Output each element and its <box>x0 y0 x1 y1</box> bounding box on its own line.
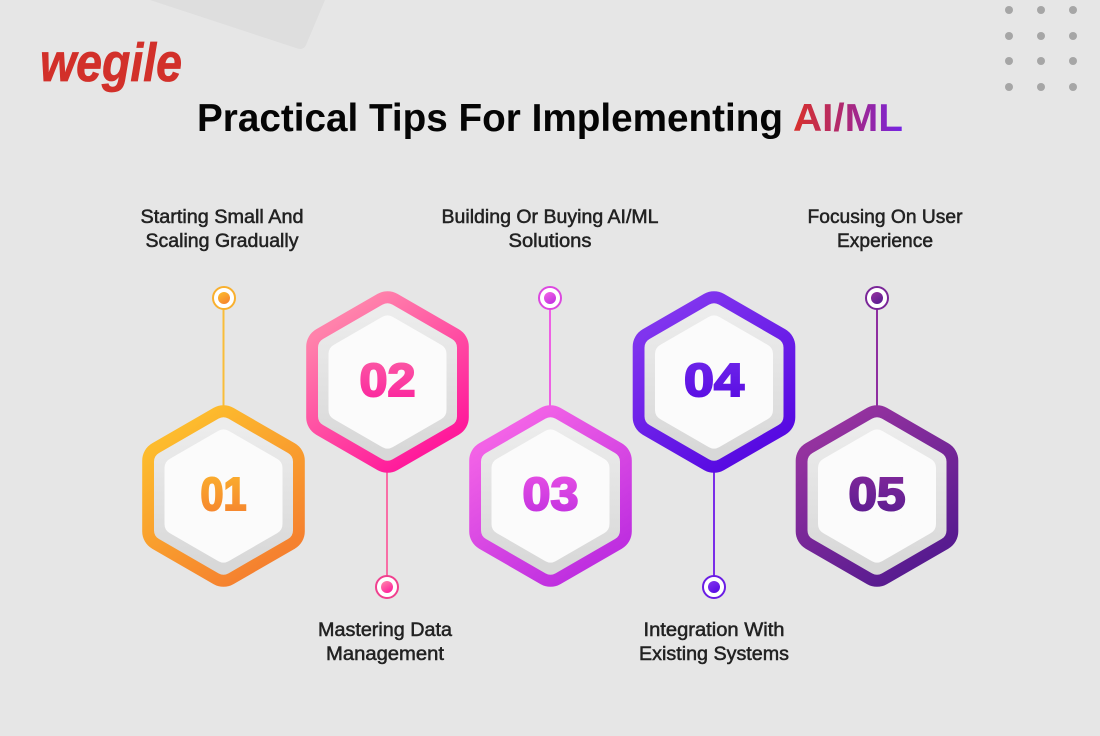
step 4 <box>639 311 789 665</box>
step 3 connector <box>539 287 561 406</box>
step 4 hexagon <box>653 311 775 453</box>
step 3 label: Building Or Buying AI/ML <box>442 207 658 228</box>
step 2 label: Management <box>326 644 445 665</box>
step 3 label: Solutions <box>508 231 592 252</box>
dot grid <box>1005 6 1077 91</box>
step 4 hexagon: 04 <box>684 354 744 406</box>
logo: wegile: wegile <box>40 33 182 93</box>
step 5 <box>808 207 963 567</box>
step 5 label: Focusing On User <box>808 207 963 228</box>
step 5 hexagon <box>816 425 938 567</box>
step 1 label: Scaling Gradually <box>146 231 299 252</box>
step 4 connector <box>703 472 725 598</box>
step 2 <box>318 311 452 665</box>
step 5 label: Experience <box>837 231 933 252</box>
step 1 hexagon <box>162 425 285 567</box>
step 1 label: Starting Small And <box>140 207 304 228</box>
title: Practical Tips For Implementing <box>197 97 783 140</box>
title: AI/ML <box>793 97 903 140</box>
step 2 label: Mastering Data <box>318 620 452 641</box>
step 1 connector <box>213 287 235 406</box>
step 3 hexagon: 03 <box>522 468 578 520</box>
decorative corner shape <box>150 0 325 49</box>
step 1 <box>140 207 304 567</box>
step 4 label: Existing Systems <box>639 644 789 665</box>
step 4 label: Integration With <box>644 620 784 641</box>
step 3 <box>442 207 658 567</box>
step 2 hexagon: 02 <box>360 354 416 406</box>
step 1 hexagon: 01 <box>200 468 246 520</box>
step 3 hexagon <box>489 425 612 567</box>
step 5 hexagon: 05 <box>848 468 906 520</box>
step 5 connector <box>866 287 888 406</box>
step 2 connector <box>376 472 398 598</box>
step 2 hexagon <box>326 311 449 453</box>
